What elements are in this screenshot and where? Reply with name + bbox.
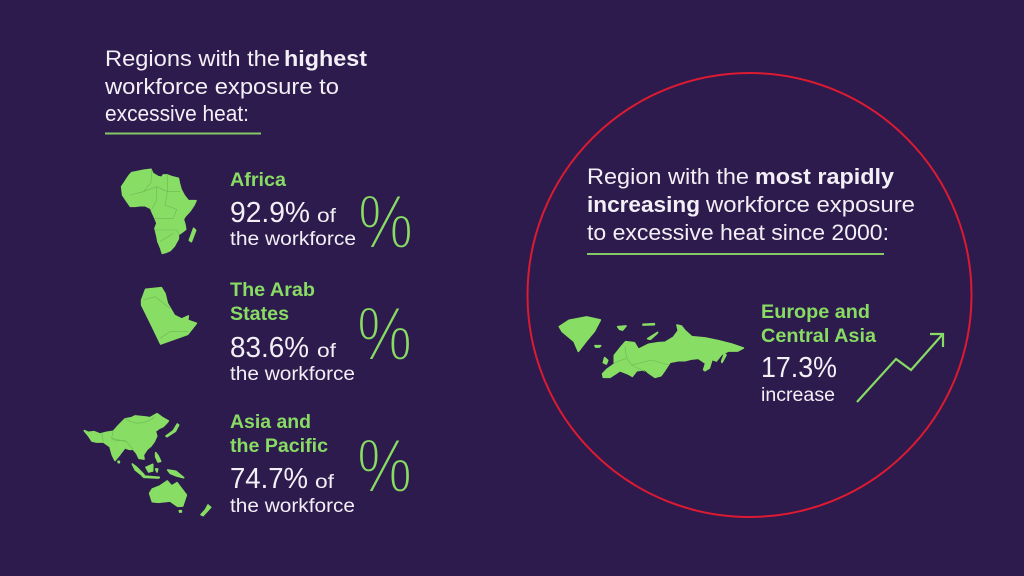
text: Asia and the Pacific [230,412,355,517]
text: Arab States: The Arab [230,280,315,301]
text: Europe and Central Asia: Central Asia [761,326,876,347]
text: Arab States: the workforce [230,364,355,385]
heading: most rapidly increasing: increasing [587,192,700,217]
map: Europe and Central Asia [559,317,743,377]
text: Asia and the Pacific: 74.7% [230,463,308,495]
text: Africa: of [317,206,337,227]
text: Europe and Central Asia [761,302,876,406]
icon: rising trend arrow [857,334,943,402]
text: Asia and the Pacific: Asia and [230,412,311,433]
text: Europe and Central Asia: increase [761,385,835,406]
map: Arab States [142,288,196,344]
text: Arab States: States [230,304,289,325]
heading: most rapidly increasing: workforce exposure [705,192,915,217]
heading: highest exposure: workforce exposure to [104,74,339,99]
heading: highest exposure [104,46,368,134]
icon: percent sign Arab States: % [357,292,412,377]
heading: most rapidly increasing: to excessive heat since 2000: [587,220,889,245]
icon: percent sign Africa: % [358,180,413,265]
panel: highest exposure regions [84,46,413,517]
heading: most rapidly increasing [587,164,915,255]
text: Asia and the Pacific: of [315,472,335,493]
text: Africa: the workforce [230,229,356,250]
heading: highest exposure: Regions with the [105,46,280,71]
heading: most rapidly increasing: most rapidly [755,164,895,189]
text: Africa: Africa [230,170,286,191]
text: Africa: 92.9% [230,197,310,229]
map: Africa [122,169,196,253]
text: Arab States: 83.6% [230,332,309,364]
text: Europe and Central Asia: 17.3% [761,352,837,384]
heading: most rapidly increasing: Region with the [587,164,749,189]
map: Asia and the Pacific [84,414,211,516]
text: Asia and the Pacific: the workforce [230,496,355,517]
red circle outline [528,73,972,517]
text: Asia and the Pacific: the Pacific [230,436,328,457]
heading: highest exposure: highest [284,46,368,71]
text: Africa [230,170,356,250]
icon: percent sign Asia and the Pacific: % [357,424,412,509]
text: Arab States [230,280,355,385]
panel: most rapidly increasing region [528,73,972,517]
text: Arab States: of [317,341,337,362]
text: Europe and Central Asia: Europe and [761,302,870,323]
heading: highest exposure: excessive heat: [105,101,249,126]
